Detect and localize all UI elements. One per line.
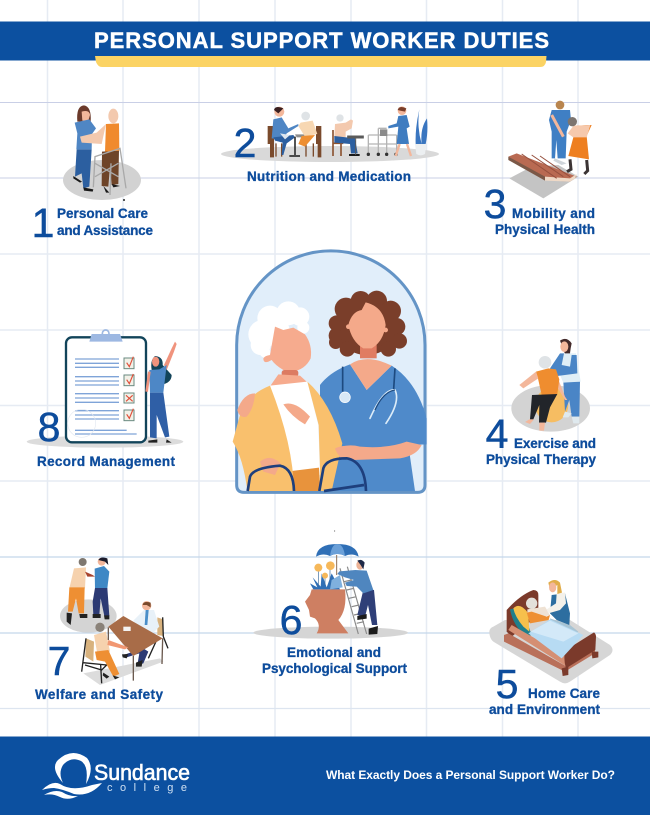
label: welfare and safety: Welfare and Safety xyxy=(35,687,163,702)
footer band xyxy=(0,736,650,815)
label: emotional and psychological support xyxy=(262,645,408,676)
logo: Sundance College xyxy=(42,753,190,799)
panel: 1 personal care and assistance xyxy=(32,105,153,246)
illustration: caregiver beside a patient in bed xyxy=(489,580,612,683)
panel: 8 record management xyxy=(27,330,183,469)
label: home care and environment: and Environment xyxy=(489,702,600,717)
label: home care and environment xyxy=(489,686,600,717)
label: exercise and physical therapy: Exercise and xyxy=(514,436,596,451)
logo: Sundance College: Sundance xyxy=(94,760,190,785)
label: mobility and physical health xyxy=(495,206,595,237)
number 7: 7 xyxy=(48,638,70,684)
panel: 2 nutrition and medication xyxy=(221,106,439,184)
walker xyxy=(248,458,366,491)
elderly patient xyxy=(233,301,353,491)
number 3: 3 xyxy=(484,181,506,227)
illustration: person tending a mind garden under an umbrella xyxy=(253,530,408,639)
number 1: 1 xyxy=(32,200,54,246)
label: exercise and physical therapy xyxy=(486,436,596,467)
illustration: physical support on steps xyxy=(508,101,592,198)
label: mobility and physical health: Physical Health xyxy=(495,222,595,237)
panel: 3 mobility and physical health xyxy=(484,101,595,237)
number 4: 4 xyxy=(486,411,508,457)
central illustration: nurse and elderly patient in arch xyxy=(233,251,427,492)
number 6: 6 xyxy=(280,597,302,643)
label: personal care and assistance xyxy=(57,206,153,238)
logo: Sundance College: college xyxy=(107,782,187,794)
illustration: nurse helping patient with walker xyxy=(63,105,141,201)
panel: 5 home care and environment xyxy=(489,580,612,717)
number 5: 5 xyxy=(496,661,518,707)
label: personal care and assistance: Personal Care xyxy=(57,206,148,221)
illustration: dining scene with nurses and walker xyxy=(221,106,439,162)
illustration: clipboard and woman waving xyxy=(27,330,183,448)
label: nutrition and medication: Nutrition and Medication xyxy=(247,169,411,184)
label: mobility and physical health: Mobility and xyxy=(512,206,595,221)
illustration: therapist with patient on exercise ball xyxy=(511,339,590,432)
label: home care and environment: Home Care xyxy=(528,686,600,701)
panel: 7 welfare and safety xyxy=(35,557,168,702)
title banner: PERSONAL SUPPORT WORKER DUTIES xyxy=(94,28,549,53)
label: record management: Record Management xyxy=(37,454,176,469)
arch frame xyxy=(237,251,425,492)
panel: 4 exercise and physical therapy xyxy=(486,339,596,467)
label: emotional and psychological support: Psychological Support xyxy=(262,661,408,676)
illustration: nurse with patient and doctor consultation table xyxy=(60,557,168,685)
title banner xyxy=(0,22,650,67)
label: exercise and physical therapy: Physical Therapy xyxy=(486,452,596,467)
number 8: 8 xyxy=(38,404,60,450)
label: emotional and psychological support: Emotional and xyxy=(287,645,381,660)
label: personal care and assistance: and Assistance xyxy=(57,223,153,238)
footer tagline: What Exactly Does a Personal Support Worker Do? xyxy=(326,768,615,782)
number 2: 2 xyxy=(234,120,256,166)
nurse xyxy=(320,291,427,491)
panel: 6 emotional and psychological support xyxy=(253,530,408,676)
